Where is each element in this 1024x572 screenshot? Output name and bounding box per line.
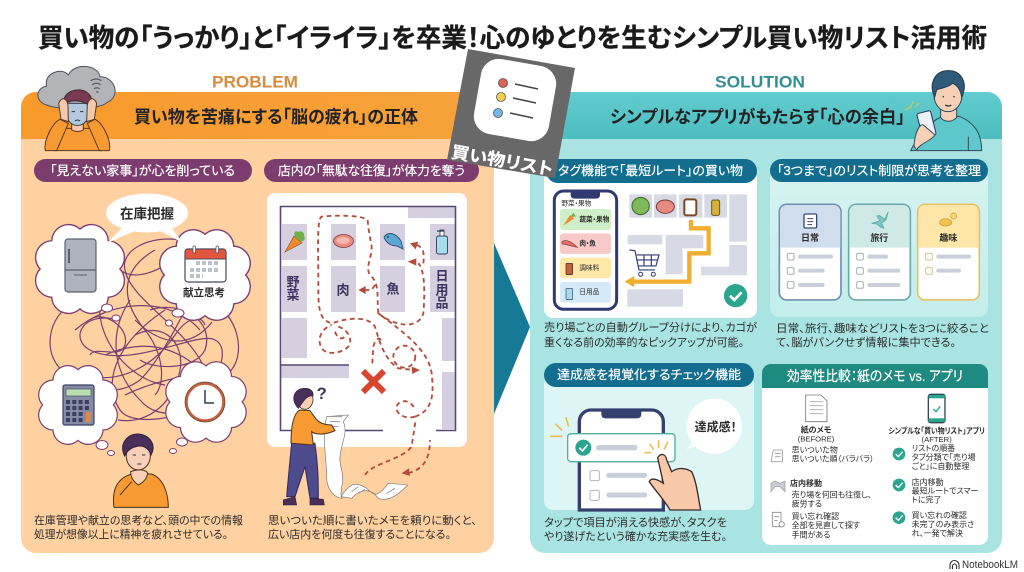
route arrowheads xyxy=(358,242,420,476)
list card: travel: 旅行 xyxy=(870,232,888,243)
thinking person xyxy=(113,434,168,507)
aisle labels: 用 xyxy=(435,282,449,298)
pill: tag routing xyxy=(546,159,757,183)
caption: chores: 処理が想像以上に精神を疲れさせている。 xyxy=(34,527,228,541)
icon: red cross xyxy=(363,371,384,392)
aisle labels: 品 xyxy=(435,296,449,310)
card: efficiency comparison xyxy=(762,364,988,545)
caption: check feature: タップで項目が消える快感が、タスクを xyxy=(544,515,727,529)
column: paper memo: 思いついた物 xyxy=(792,444,838,454)
column: paper memo: 店内移動 xyxy=(790,478,822,488)
column: shopping list app: (AFTER) xyxy=(922,435,952,444)
aisle labels: 肉 xyxy=(336,282,350,298)
icon: calculator xyxy=(63,385,94,425)
caption: tag routing: 売り場ごとの自動グループ分けにより、カゴが xyxy=(544,320,757,334)
column: paper memo: 手間がある xyxy=(792,529,830,539)
app icon: shopping list xyxy=(447,49,575,179)
caption: three lists: て、脳がパンクせず情報に集中できる。 xyxy=(776,335,956,349)
caption: chores: 在庫管理や献立の思考など、頭の中での情報 xyxy=(34,513,243,527)
column: shopping list app: れ、一発で解決 xyxy=(912,528,963,538)
pill: tag routing: タグ機能で「最短ルート」の買い物 xyxy=(558,163,743,178)
arrow: problem to solution xyxy=(494,243,530,414)
column: shopping list app: シンプルな「買い物リスト」アプリ xyxy=(888,425,985,435)
caption: check feature: やり遂げたという確かな充実感を生む。 xyxy=(544,529,727,543)
solution label: SOLUTION xyxy=(715,72,805,92)
column: paper memo: 思いついた順（バラバラ） xyxy=(792,454,874,463)
store map xyxy=(267,193,467,505)
caption: chores xyxy=(34,513,243,541)
aisle labels: 野 xyxy=(286,274,300,290)
column: shopping list app: 最短ルートでスマー xyxy=(912,485,979,495)
thought cloud: calculator xyxy=(39,366,117,444)
column: shopping list app: リストの順番 xyxy=(912,443,955,453)
icon: calendar xyxy=(185,246,226,282)
list cards xyxy=(779,204,979,300)
caption: walking: 思いついた順に書いたメモを頼りに動くと、 xyxy=(268,513,477,527)
aisle labels xyxy=(286,268,449,310)
caption: tag routing xyxy=(544,320,757,349)
caption: walking xyxy=(268,513,477,541)
confused shopper: ? xyxy=(317,384,327,403)
shortest route map xyxy=(624,194,747,307)
phone with grouped tags: 調味料 xyxy=(579,263,600,272)
problem heading: 買い物を苦痛にする「脳の疲れ」の正体 xyxy=(134,107,418,127)
column: shopping list app: タブ分類で「売り場 xyxy=(911,452,976,462)
title: 買い物の「うっかり」と「イライラ」を卒業！心のゆとりを生むシンプル買い物リスト活用術 xyxy=(38,23,987,53)
stressed person icon xyxy=(38,66,115,151)
aisle labels: 日 xyxy=(435,268,449,284)
column: paper memo: 疲労する xyxy=(792,498,822,508)
dashed wandering route xyxy=(318,216,433,475)
icon: carrot xyxy=(285,231,305,252)
problem label: PROBLEM xyxy=(212,72,298,92)
pill: three lists: 「3つまで」のリスト制限が思考を整理 xyxy=(777,163,982,178)
pointing hand xyxy=(649,454,701,510)
label: menu planning: 献立思考 xyxy=(183,286,225,299)
column: paper memo xyxy=(771,395,874,539)
column: shopping list app: トに完了 xyxy=(912,495,941,504)
list card: travel xyxy=(849,204,910,300)
speech bubble: achievement xyxy=(687,399,742,454)
thought cloud: clock xyxy=(166,362,246,442)
column: shopping list app: 買い忘れの確認 xyxy=(912,510,967,520)
list card: daily xyxy=(779,204,841,300)
column: paper memo: 紙のメモ xyxy=(801,424,831,434)
card: three list limit xyxy=(770,159,989,349)
speech bubble: inventory: 在庫把握 xyxy=(120,206,174,222)
pill: wasteful walking xyxy=(264,159,479,182)
panel: problem xyxy=(21,66,494,553)
column: paper memo: (BEFORE) xyxy=(798,434,835,443)
pill: invisible chores: 「見えない家事」が心を削っている xyxy=(50,163,235,178)
column: shopping list app xyxy=(888,394,985,538)
phone with grouped tags: 日用品 xyxy=(579,288,600,296)
brand: NotebookLM: NotebookLM xyxy=(962,559,1018,571)
aisle labels: 魚 xyxy=(386,282,400,296)
pill: invisible chores xyxy=(34,159,252,182)
card: check feature xyxy=(544,363,754,543)
column: paper memo: 全部を見直して探す xyxy=(792,520,860,530)
column: shopping list app: ごと」に自動整理 xyxy=(912,461,969,471)
panel: solution xyxy=(530,71,1002,553)
caption: check feature xyxy=(544,515,727,543)
phone with grouped tags: 野菜・果物 xyxy=(561,198,592,207)
confused shopper xyxy=(283,384,408,505)
list card: hobby xyxy=(918,204,979,300)
icon: clock xyxy=(185,382,225,422)
happy person with phone xyxy=(905,71,982,151)
pill: wasteful walking: 店内の「無駄な往復」が体力を奪う xyxy=(278,163,465,178)
illustration: tangled thoughts xyxy=(36,194,250,456)
phone tap illustration xyxy=(551,399,742,510)
list card: daily: 日常 xyxy=(801,232,819,243)
column: shopping list app: 店内移動 xyxy=(912,477,944,487)
speech bubble: achievement: 達成感！ xyxy=(695,419,737,434)
comparison columns xyxy=(771,394,985,539)
pill: check feature: 達成感を視覚化するチェック機能 xyxy=(557,367,742,382)
caption: tag routing: 重くなる前の効率的なピックアップが可能。 xyxy=(544,335,744,349)
icon: detergent bottle xyxy=(436,230,448,254)
caption: three lists: 日常、旅行、趣味などリストを3つに絞ること xyxy=(776,321,989,335)
thought cloud: menu planning xyxy=(160,230,250,320)
aisle labels: 菜 xyxy=(286,288,300,302)
pill: check feature xyxy=(544,363,754,387)
card: tag routing xyxy=(544,159,757,349)
phone with grouped tags: 蔬菜・果物 xyxy=(579,214,610,223)
solution heading: シンプルなアプリがもたらす「心の余白」 xyxy=(610,107,905,127)
phone with grouped tags xyxy=(554,191,617,309)
app icon: shopping list: 買い物リスト xyxy=(450,143,554,179)
caption: three lists xyxy=(776,321,989,349)
icon: fish xyxy=(384,234,403,249)
list card: hobby: 趣味 xyxy=(939,232,957,243)
speech bubble: inventory xyxy=(106,194,188,243)
pill: three lists xyxy=(770,159,988,182)
comparison heading xyxy=(762,364,988,388)
icon: meat xyxy=(334,234,354,248)
comparison heading: 効率性比較：紙のメモ vs. アプリ xyxy=(787,368,963,384)
caption: walking: 広い店内を何度も往復することになる。 xyxy=(268,527,451,541)
column: paper memo: 買い忘れ確認 xyxy=(792,511,839,521)
icon: fridge xyxy=(65,239,96,292)
column: paper memo: 売り場を何回も往復し、 xyxy=(792,489,872,499)
thought cloud: fridge xyxy=(36,225,124,313)
column: shopping list app: 未完了のみ表示さ xyxy=(912,519,974,529)
phone with grouped tags: 肉・魚 xyxy=(579,238,596,247)
